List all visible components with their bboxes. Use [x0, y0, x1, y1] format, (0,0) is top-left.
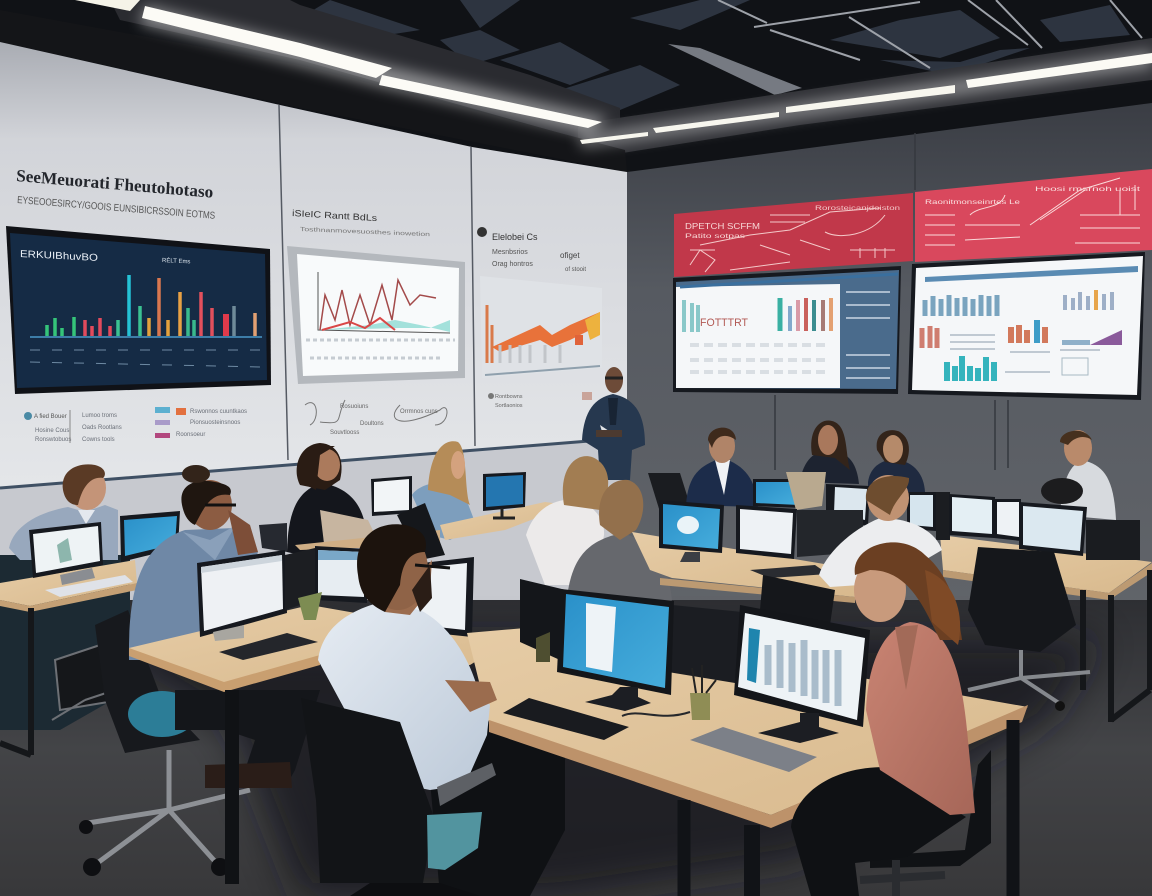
person: man right	[1041, 430, 1116, 520]
wall title right: Elelobei Cs	[492, 232, 538, 242]
left wall panels	[0, 42, 627, 640]
person: woman in dark jacket	[259, 443, 375, 555]
chair of man with glasses	[79, 610, 250, 876]
wall notes middle: Doultons	[360, 421, 384, 427]
legs of man with glasses	[175, 690, 320, 788]
keyboard left	[219, 633, 318, 660]
pen cup	[690, 665, 716, 720]
wall title right: ofiget	[560, 251, 580, 260]
dark chart screen	[6, 226, 271, 394]
monitor small blue	[483, 472, 526, 518]
monitor side front	[405, 557, 474, 637]
floor shadow under desks	[80, 640, 1100, 896]
front desk	[467, 625, 1028, 896]
wall notes middle: Souvtlooss	[330, 430, 359, 436]
person: man in front, seen from behind	[318, 524, 497, 790]
wall title left: SeeMeuorati Fheutohotaso	[16, 166, 214, 202]
bottle	[536, 632, 550, 662]
wall notes right: Sortlaonios	[495, 403, 523, 409]
tablet on desk	[690, 727, 817, 772]
wall notes middle	[305, 400, 447, 436]
back row monitors	[753, 472, 1140, 560]
left back desk	[0, 560, 137, 755]
wall logos and notes left: Rswonnos cuuntkaos	[190, 409, 247, 415]
monitor back mid white	[285, 546, 367, 610]
large left monitor: FOTTTRT	[700, 317, 748, 329]
red panel left: Rorosteicanjdoiston	[815, 206, 900, 212]
middle back desk	[295, 502, 570, 550]
ceiling lights	[75, 0, 1152, 148]
wall notes right: Rontbowns	[495, 394, 523, 400]
front right chair	[860, 750, 991, 896]
black chair behind blonde	[397, 503, 445, 560]
dark chart screen: RÉLT Ems	[162, 257, 190, 265]
wall logos and notes left: Ronswtobuos	[35, 437, 71, 443]
wall logos and notes left: A fied Bouer	[34, 414, 67, 420]
keyboard front	[503, 698, 629, 740]
front chair	[301, 698, 496, 896]
wall logos and notes left: Oads Rootlans	[82, 425, 122, 431]
monitor backs	[520, 579, 742, 683]
monitor small white	[371, 476, 412, 516]
plant pot	[298, 592, 322, 620]
ceiling	[0, 0, 1152, 190]
right wall	[627, 103, 1152, 640]
person: man with glasses	[129, 465, 258, 660]
red panel right: Raonitmonseinrtes Le	[925, 200, 1021, 206]
person: woman in grey back	[567, 480, 672, 610]
chair back left	[52, 640, 120, 720]
wall title middle: Tosthnanmovesuosthes inowetion	[300, 227, 430, 238]
back right desk	[632, 532, 1152, 722]
monitor front right with bars	[734, 605, 870, 743]
floor	[0, 600, 1152, 896]
monitor front centre	[557, 589, 674, 711]
wall title right: of stooit	[565, 267, 586, 273]
wall notes right	[488, 392, 592, 409]
chair behind navy suit	[648, 473, 690, 512]
orange line chart poster	[480, 276, 602, 378]
dark chart screen: ERKUIBhuvBO	[20, 249, 98, 264]
monitor blue centre back	[659, 500, 724, 562]
red panel right: Hoosi rmsrnoh uoist	[1035, 187, 1141, 193]
person: man in navy suit	[686, 428, 758, 507]
presenter	[582, 367, 645, 480]
person: woman at back right	[868, 430, 925, 492]
person: blonde woman	[412, 441, 476, 540]
wall notes middle: Orrmnos cuns	[400, 409, 438, 415]
chair right	[968, 547, 1090, 711]
large right monitor	[908, 252, 1145, 400]
chair back centre	[760, 575, 835, 625]
large left monitor	[673, 266, 901, 394]
man legs below desk	[430, 720, 565, 896]
wall title middle	[292, 208, 430, 238]
red panel left: Patito sotpas	[685, 234, 745, 240]
people backs group	[526, 456, 608, 585]
left front desk	[129, 605, 510, 884]
wall title right	[477, 227, 586, 273]
wall logos and notes left: Hosine Cous	[35, 428, 69, 434]
monitor white centre back	[736, 505, 863, 578]
monitor back left blue	[120, 511, 180, 562]
papers	[45, 575, 133, 597]
red panel left: DPETCH SCFFM	[685, 222, 760, 231]
wall title right: Orag hontros	[492, 261, 533, 268]
wall title left: EYSEOOESIRCY/GOOIS EUNSIBICRSSOIN EOTMS	[17, 195, 216, 222]
glasses	[622, 712, 690, 716]
wall logos and notes left: Cowns tools	[82, 437, 115, 443]
red panel left	[674, 193, 913, 277]
wall title middle: iSIeIC Rantt BdLs	[292, 208, 378, 223]
person: woman at back	[800, 421, 859, 484]
person: man in white shirt seen from behind	[819, 475, 942, 587]
wall logos and notes left: Lumoo troms	[82, 413, 117, 419]
wall logos and notes left: Roonsoeur	[176, 432, 205, 438]
wall logos and notes left: Pionsuosteinsnoos	[190, 420, 240, 426]
dark area behind left desks	[0, 555, 130, 730]
white line chart screen	[287, 246, 465, 384]
wall title right: Mesnbsrios	[492, 249, 528, 256]
wall logos and notes left	[24, 407, 247, 443]
wall notes middle: Rosuoiuns	[340, 404, 368, 410]
person: man left back	[9, 464, 118, 560]
monitor back left white	[29, 522, 103, 585]
wall title left	[16, 166, 216, 222]
monitor left front	[197, 550, 287, 641]
person: woman in pink cardigan	[791, 542, 975, 896]
red panel right	[915, 169, 1152, 262]
